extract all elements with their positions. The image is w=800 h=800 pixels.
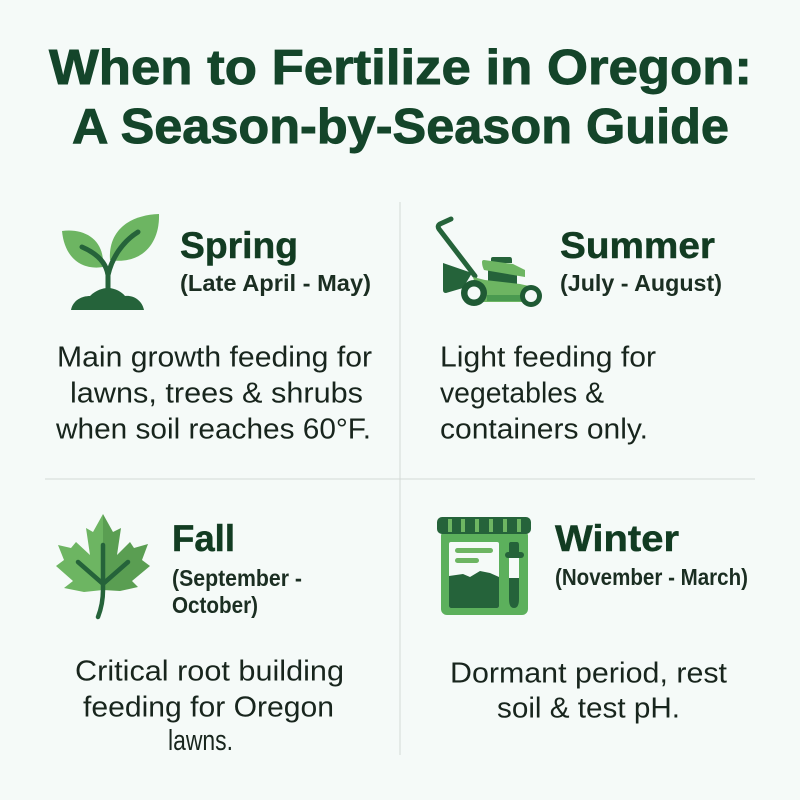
- panel: spring: [55, 214, 372, 446]
- panel: summer: [438, 219, 722, 446]
- dates: winter: (November - March): [555, 564, 748, 590]
- text: fall: feeding for Oregon: [83, 692, 334, 724]
- text: winter: Dormant period, rest: [450, 658, 727, 690]
- dates: summer: (July - August): [560, 270, 722, 296]
- text: fall: lawns.: [168, 725, 233, 757]
- text: spring: Main growth feeding for: [57, 342, 372, 374]
- dates: spring: (Late April - May): [180, 270, 371, 296]
- heading: summer: Summer: [560, 225, 715, 266]
- dates: fall: October): [172, 592, 258, 618]
- title: [49, 41, 752, 154]
- text: winter: soil & test pH.: [497, 692, 680, 724]
- panel: fall: [56, 514, 344, 757]
- heading: winter: Winter: [555, 518, 679, 559]
- text: spring: when soil reaches 60°F.: [55, 414, 371, 446]
- text: summer: Light feeding for: [440, 342, 656, 374]
- icon: soil test jar: [437, 517, 531, 615]
- text: summer: vegetables &: [440, 378, 604, 410]
- text: fall: [75, 656, 344, 757]
- title: When to Fertilize in Oregon:: [49, 41, 752, 95]
- dates: fall: [172, 565, 302, 618]
- heading: spring: Spring: [180, 225, 298, 266]
- text: fall: Critical root building: [75, 656, 344, 688]
- title: A Season-by-Season Guide: [72, 100, 729, 154]
- panel: winter: [437, 517, 748, 724]
- text: spring: [55, 342, 372, 446]
- text: summer: containers only.: [440, 414, 648, 446]
- text: spring: lawns, trees & shrubs: [70, 378, 363, 410]
- heading: fall: Fall: [172, 518, 235, 559]
- icon: maple leaf: [56, 514, 150, 617]
- icon: lawn mower: [438, 219, 542, 307]
- text: summer: [440, 342, 656, 446]
- dates: fall: (September -: [172, 565, 302, 591]
- text: winter: [450, 658, 727, 724]
- icon: sprout: [62, 214, 159, 310]
